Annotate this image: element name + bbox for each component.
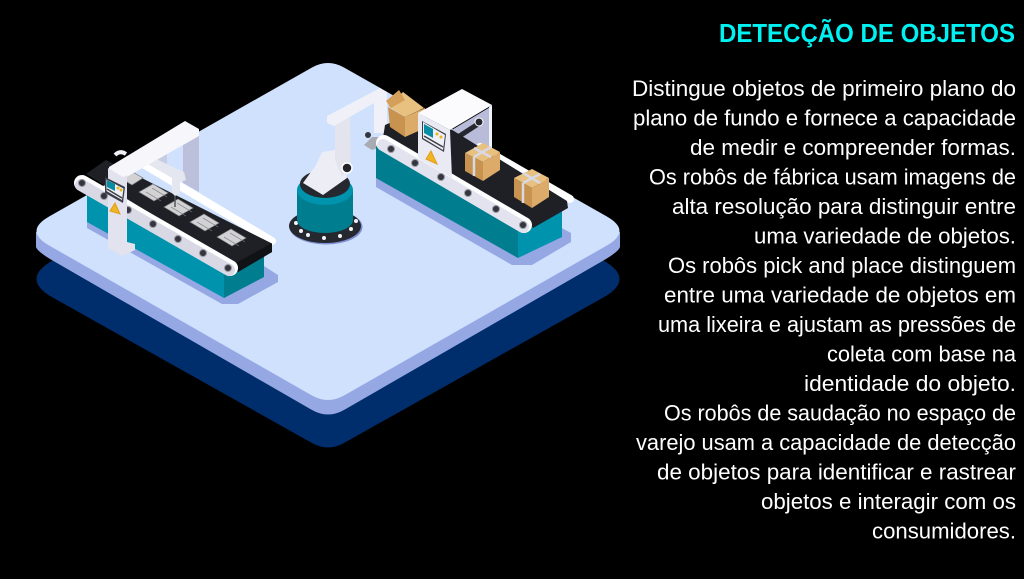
conveyor base front xyxy=(376,146,518,258)
base plate xyxy=(289,209,361,243)
body text: consumidores. xyxy=(872,518,1016,544)
body text: uma lixeira e ajustam as pressões de xyxy=(658,312,1016,337)
body text: uma variedade de objetos. xyxy=(754,224,1016,248)
arm lower body xyxy=(303,150,347,195)
left conveyor xyxy=(78,121,278,304)
platform side xyxy=(36,232,620,414)
base plate shadow xyxy=(290,210,362,244)
front rail xyxy=(82,183,230,268)
arm joint xyxy=(342,163,352,173)
body text: Os robôs de saudação no espaço de xyxy=(664,400,1016,426)
belt xyxy=(86,160,272,272)
robot arm on round base xyxy=(289,88,387,244)
body text xyxy=(632,76,1017,544)
body text: de objetos para identificar e rastrear xyxy=(657,460,1016,484)
sealed box 2 xyxy=(514,169,549,208)
arm upper column xyxy=(335,112,351,176)
gantry front post xyxy=(108,168,135,256)
back rail xyxy=(143,164,272,241)
gantry back post xyxy=(183,130,199,192)
teal cylinder xyxy=(297,190,353,233)
gripper arm xyxy=(146,158,186,207)
body text: de medir e compreender formas. xyxy=(690,135,1016,160)
body text: entre uma variedade de objetos em xyxy=(664,282,1016,308)
body text: alta resolução para distinguir entre xyxy=(672,194,1016,219)
body text: Os robôs pick and place distinguem xyxy=(668,253,1016,278)
chips on belt xyxy=(120,171,246,246)
rail bolts xyxy=(78,180,232,272)
conveyor shadow xyxy=(87,218,278,304)
body text: objetos e interagir com os xyxy=(761,489,1016,514)
body text: coleta com base na xyxy=(827,342,1017,366)
sealed box 1 xyxy=(465,143,500,181)
body text: plano de fundo e fornece a capacidade xyxy=(633,106,1016,130)
conveyor base front xyxy=(87,190,224,298)
conveyor shadow xyxy=(376,176,571,265)
right conveyor xyxy=(376,89,571,265)
body text: Os robôs de fábrica usam imagens de xyxy=(649,164,1016,190)
cylinder black top xyxy=(300,170,350,198)
gantry beam xyxy=(109,121,199,179)
belt xyxy=(383,110,568,228)
back rail xyxy=(480,147,570,199)
machine back wall xyxy=(450,106,492,155)
warning icon xyxy=(426,151,437,164)
platform top surface xyxy=(36,63,620,400)
arm gripper xyxy=(364,132,385,150)
body text: identidade do objeto. xyxy=(804,371,1016,396)
conveyor base end xyxy=(224,250,264,298)
body text: varejo usam a capacidade de detecção xyxy=(636,430,1016,455)
rail bolts xyxy=(388,146,526,228)
front rail xyxy=(384,143,524,225)
illustration: isometric factory platform xyxy=(36,63,620,448)
open box xyxy=(386,90,425,137)
plate dots xyxy=(294,219,358,240)
body text: Distingue objetos de primeiro plano do xyxy=(632,76,1016,101)
control panel xyxy=(105,177,125,203)
platform shadow layer xyxy=(36,116,620,448)
warning icon xyxy=(110,203,120,214)
arm horizontal beam xyxy=(327,88,387,133)
conveyor base end xyxy=(518,210,562,258)
machine housing xyxy=(418,89,492,178)
